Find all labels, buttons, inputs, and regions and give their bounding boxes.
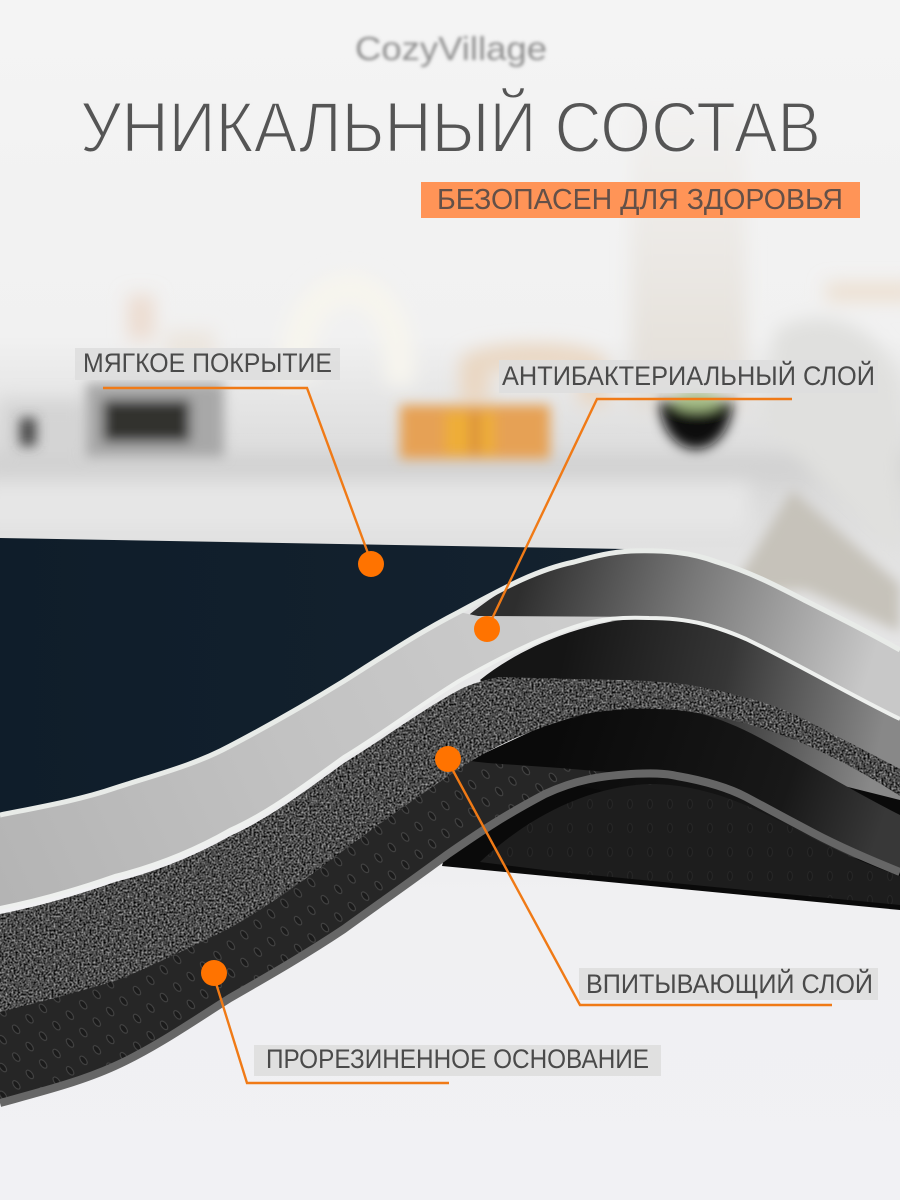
layer: light antibacterial face [0,612,649,908]
callout: soft cover: МЯГКОЕ ПОКРЫТИЕ [83,348,332,378]
callout: rubberised base [201,960,661,1083]
callout: antibacterial layer: АНТИБАКТЕРИАЛЬНЫЙ СЛОЙ [502,360,875,391]
title: УНИКАЛЬНЫЙ СОСТАВ [80,88,821,168]
dark underside of absorbent layer [480,618,900,800]
layer: rubberised base surface [0,760,631,1103]
callout: rubberised base: ПРОРЕЗИНЕННОЕ ОСНОВАНИЕ [266,1044,649,1074]
callout: absorbent layer: ВПИТЫВАЮЩИЙ СЛОЙ [586,968,873,999]
layer: navy soft cover [0,538,631,815]
white edge of second sheet [0,618,900,908]
black underside of mat [442,690,900,910]
grey underside of top sheet [470,551,900,725]
brand name: CozyVillage [355,30,547,67]
callout: absorbent layer [435,746,878,1005]
layered mat cross-section [0,538,900,1103]
black hollow under foam [500,705,900,870]
layer: absorbent foam [0,677,900,1012]
callout: antibacterial layer [474,360,878,642]
callout: soft cover [75,348,384,577]
subtitle badge: БЕЗОПАСЕН ДЛЯ ЗДОРОВЬЯ [437,184,843,216]
white edge of top sheet [0,551,900,815]
grey edge of rubber base [0,773,900,1103]
rubber underside [480,784,900,905]
